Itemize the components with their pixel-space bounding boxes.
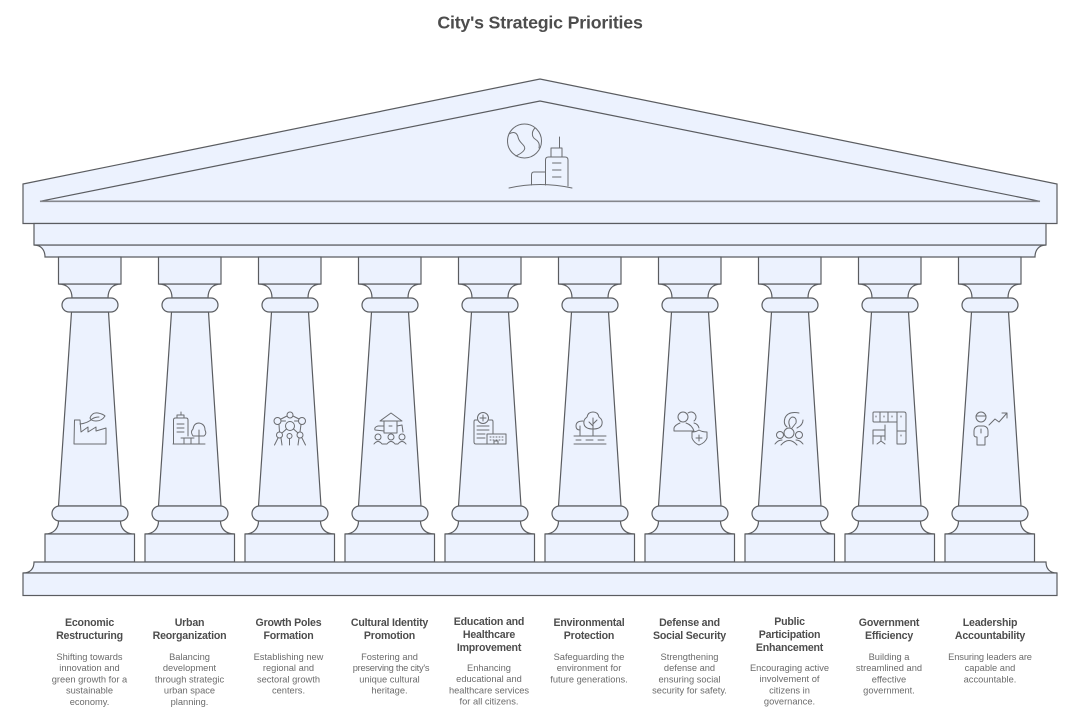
text block: Economic Restructuring: Restructuring [56, 630, 123, 642]
text block: Defense and Social Security: Defense and [659, 617, 720, 629]
text block: Leadership Accountability: Ensuring leaders are [948, 652, 1032, 662]
icon: city building and tree [173, 412, 206, 444]
text block: Environmental Protection: Safeguarding the [554, 652, 624, 662]
text block: Government Efficiency: streamlined and [856, 663, 922, 673]
entablature [34, 224, 1046, 257]
title: City's Strategic Priorities [437, 12, 643, 32]
column 4 [345, 257, 434, 562]
column 1 [45, 257, 134, 562]
text block: Leadership Accountability: accountable. [964, 674, 1016, 684]
text block: Leadership Accountability: Accountability [955, 630, 1025, 642]
text block: Urban Reorganization: development [163, 663, 217, 673]
text block: Government Efficiency [856, 617, 922, 696]
text block: Leadership Accountability: capable and [965, 663, 1015, 673]
pediment roof [23, 79, 1057, 224]
text block: Public Participation Enhancement [750, 616, 829, 707]
text block: Defense and Social Security [652, 617, 727, 696]
text block: Cultural Identity Promotion: unique cultural [359, 674, 420, 684]
text block: Defense and Social Security: defense and [664, 663, 715, 673]
icon: atomium network [274, 412, 306, 445]
text block: Cultural Identity Promotion [351, 617, 430, 696]
text block: Economic Restructuring: innovation and [59, 663, 120, 673]
text block: Urban Reorganization: planning. [171, 697, 208, 707]
text block: Education and Healthcare Improvement: Education and [454, 616, 524, 628]
column 9 [845, 257, 934, 562]
text block: Cultural Identity Promotion: Fostering and [361, 652, 418, 662]
text block: Growth Poles Formation: centers. [272, 686, 305, 696]
text block: Economic Restructuring: Shifting towards [56, 652, 123, 662]
text block: Education and Healthcare Improvement: Improvement [457, 642, 522, 654]
text block: Economic Restructuring: green growth for a [52, 674, 128, 684]
text block: Growth Poles Formation: Establishing new [254, 652, 324, 662]
text block: Education and Healthcare Improvement: for all citizens. [460, 697, 518, 707]
text block: Defense and Social Security: Strengthening [661, 652, 718, 662]
icon: government office layout [873, 412, 906, 444]
column 3 [245, 257, 334, 562]
text block: Cultural Identity Promotion: heritage. [371, 686, 408, 696]
icon: trees and road [574, 412, 606, 444]
text block: Defense and Social Security: ensuring social [658, 674, 721, 684]
icon: healthcare and school [474, 412, 506, 444]
text block: Public Participation Enhancement: Encouraging active [750, 663, 829, 673]
text block: Public Participation Enhancement: Enhancement [756, 642, 824, 654]
text block: Environmental Protection: Protection [564, 630, 614, 642]
text block: Public Participation Enhancement: Public [774, 616, 805, 628]
text block: Education and Healthcare Improvement: Healthcare [463, 629, 515, 641]
text block: Education and Healthcare Improvement: educational and [456, 674, 522, 684]
text block: Economic Restructuring [52, 617, 128, 707]
icon: people with shield [674, 412, 707, 445]
text block: Leadership Accountability [948, 617, 1032, 684]
text block: Environmental Protection [550, 617, 628, 684]
icon: public participation [775, 413, 803, 445]
text block: Government Efficiency: Efficiency [865, 630, 913, 642]
text block: Economic Restructuring: economy. [70, 697, 109, 707]
text block: Government Efficiency: government. [863, 686, 915, 696]
icon: cultural heritage group [374, 413, 406, 444]
text block: Growth Poles Formation: sectoral growth [257, 674, 320, 684]
text block: Public Participation Enhancement: Participation [759, 629, 820, 641]
text block: Education and Healthcare Improvement [449, 616, 529, 707]
text block: Growth Poles Formation [254, 617, 324, 696]
text block: Government Efficiency: Government [859, 617, 920, 629]
column 2 [145, 257, 234, 562]
column 8 [745, 257, 834, 562]
text block: Urban Reorganization: through strategic [155, 674, 224, 684]
text block: Education and Healthcare Improvement: Enhancing [467, 663, 511, 673]
text block: Government Efficiency: effective [872, 674, 906, 684]
text block: Environmental Protection: Environmental [554, 617, 625, 629]
column 10 [945, 257, 1034, 562]
text block: Defense and Social Security: security for safety. [652, 686, 727, 696]
text block: Environmental Protection: environment for [557, 663, 621, 673]
text block: Growth Poles Formation: regional and [263, 663, 314, 673]
text block: Cultural Identity Promotion: Promotion [364, 630, 415, 642]
text block: Defense and Social Security: Social Security [653, 630, 726, 642]
text block: Cultural Identity Promotion: preserving the city's [353, 663, 430, 673]
text block: Leadership Accountability: Leadership [963, 617, 1018, 629]
text block: Urban Reorganization: Balancing [169, 652, 210, 662]
text block: Public Participation Enhancement: citizens in [769, 685, 810, 695]
text block: Cultural Identity Promotion: Cultural Identity [351, 617, 428, 629]
text block: Urban Reorganization: urban space [164, 686, 215, 696]
text block: Environmental Protection: future generations. [550, 674, 628, 684]
panel: temple structure [23, 79, 1057, 596]
column 6 [545, 257, 634, 562]
text block: Public Participation Enhancement: involvement of [760, 674, 820, 684]
text block: Urban Reorganization: Urban [175, 617, 204, 629]
text block: Urban Reorganization [153, 617, 226, 707]
column 5 [445, 257, 534, 562]
text block: Economic Restructuring: sustainable [66, 686, 113, 696]
icon: factory and leaf [74, 413, 106, 444]
text block: Public Participation Enhancement: governance. [764, 697, 815, 707]
text block: Education and Healthcare Improvement: healthcare services [449, 685, 529, 695]
text block: Urban Reorganization: Reorganization [153, 630, 226, 642]
text block: Economic Restructuring: Economic [65, 617, 114, 629]
text block: Growth Poles Formation: Growth Poles [256, 617, 322, 629]
text block: Growth Poles Formation: Formation [264, 630, 314, 642]
icon: globe and city [508, 124, 572, 188]
text block: Government Efficiency: Building a [869, 652, 910, 662]
column 7 [645, 257, 734, 562]
icon: leader with growth arrow [974, 412, 1007, 445]
stylobate base [23, 562, 1057, 596]
